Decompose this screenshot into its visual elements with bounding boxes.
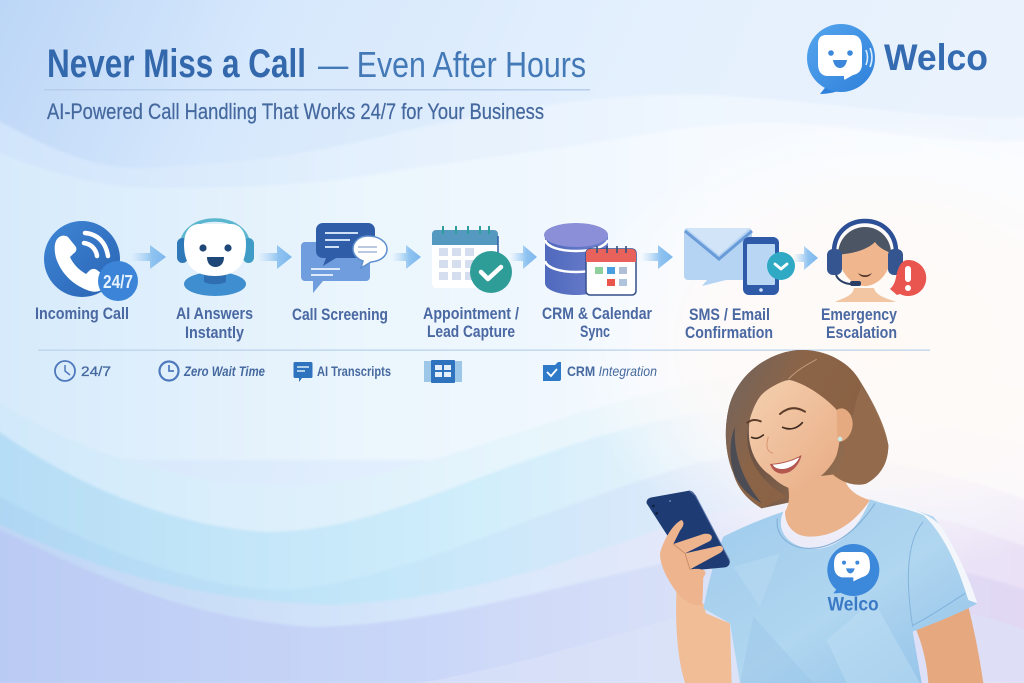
arrow: step 4 to 5 (510, 245, 537, 269)
arm left (676, 587, 732, 683)
icon: agent with headset and alert (827, 221, 926, 302)
title: Never Miss a Call (47, 42, 306, 86)
labels: steps: Escalation (826, 323, 897, 342)
hair front (726, 350, 860, 508)
feature: CRM integration: CRM Integration (567, 363, 657, 379)
icon: database and calendar (544, 223, 636, 295)
arrow: step 1 to 2 (131, 245, 166, 269)
icon: calendar with check (432, 226, 512, 293)
phone (647, 491, 730, 571)
labels: steps: AI Answers (176, 304, 253, 323)
labels: steps: Lead Capture (427, 322, 515, 341)
shirt logo: Welco (828, 595, 879, 616)
labels: steps: Sync (580, 322, 610, 341)
feature: AI transcripts: AI Transcripts (317, 363, 391, 379)
icon: incoming call: 24/7 (103, 272, 133, 292)
icon: AI robot (177, 220, 254, 296)
labels: steps: SMS / Email (689, 305, 770, 324)
arrow: step 2 to 3 (258, 245, 292, 269)
feature: 24/7 (55, 361, 111, 381)
eyes and brows (747, 408, 805, 423)
title (47, 42, 586, 86)
smile (770, 455, 802, 474)
arrow: step 3 to 4 (392, 245, 421, 269)
feature: AI transcripts (294, 362, 391, 382)
nose and cheek shadow (767, 437, 773, 453)
hair back (726, 350, 888, 508)
subtitle: AI-Powered Call Handling That Works 24/7 for Your Business (47, 99, 544, 124)
labels: steps: Emergency (821, 305, 897, 324)
face (749, 380, 840, 489)
shirt (703, 499, 977, 683)
illustration: woman with phone (647, 350, 983, 683)
icon: call screening (301, 223, 387, 293)
hand (660, 520, 723, 605)
logo: Welco (807, 24, 988, 94)
labels: steps: Appointment / (423, 304, 519, 323)
icon: incoming call (44, 221, 138, 301)
neck (785, 473, 870, 537)
icon: envelope and phone (684, 228, 795, 295)
icon: chat bubble (807, 24, 875, 94)
title: — Even After Hours (318, 44, 586, 85)
feature: 24/7: 24/7 (81, 363, 111, 379)
labels: steps: Confirmation (685, 323, 773, 342)
arrow: step 6 to 7 (793, 246, 818, 270)
logo: Welco: Welco (884, 37, 988, 78)
labels: steps: CRM & Calendar (542, 304, 652, 323)
labels: steps (35, 304, 897, 342)
arrow: step 5 to 6 (641, 245, 673, 269)
shirt logo (827, 544, 879, 616)
feature: panel icon (424, 360, 462, 383)
feature: zero wait time (160, 362, 265, 380)
feature row (55, 360, 657, 383)
labels: steps: Instantly (185, 323, 244, 342)
feature: CRM integration (543, 362, 657, 381)
arm right (915, 607, 983, 683)
hair lower right (833, 387, 888, 485)
feature: zero wait time: Zero Wait Time (183, 363, 265, 379)
ear (837, 408, 853, 442)
labels: steps: Call Screening (292, 305, 388, 324)
labels: steps: Incoming Call (35, 304, 129, 323)
